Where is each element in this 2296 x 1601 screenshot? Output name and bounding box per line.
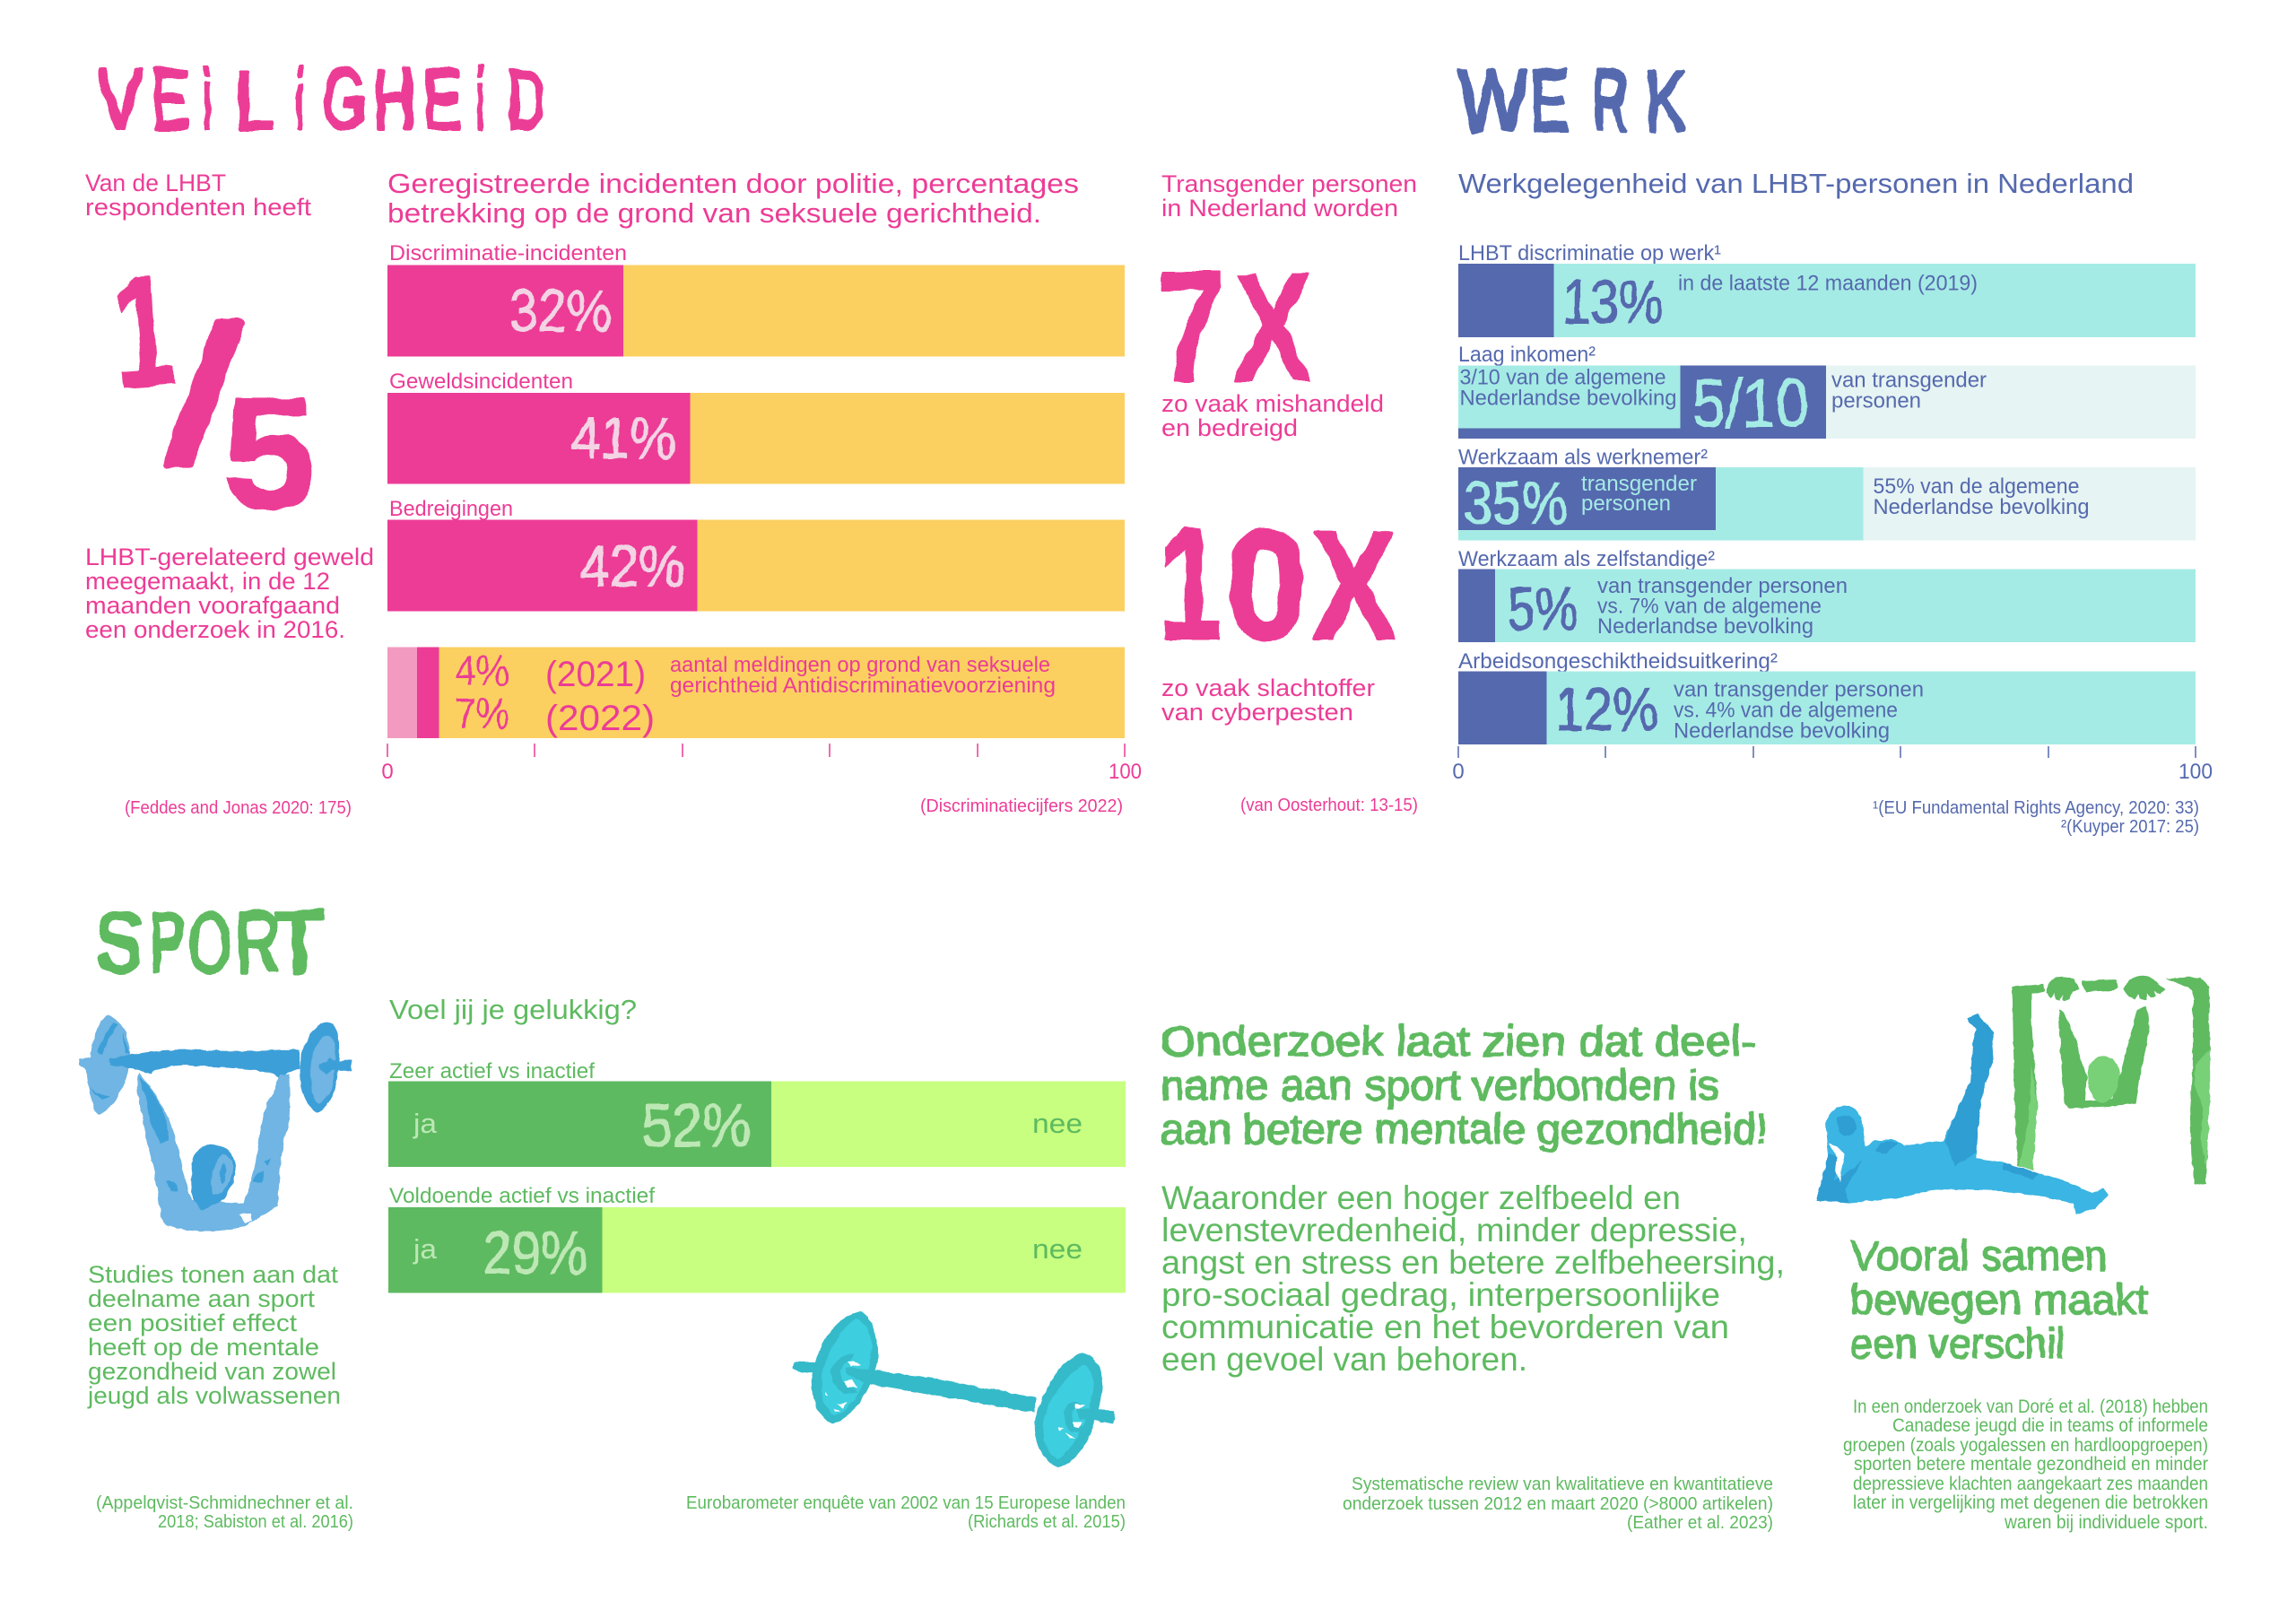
axis [1452, 746, 2213, 784]
axis: 100 [2179, 760, 2213, 784]
bar: voldoende actief 29%: ja [413, 1233, 438, 1265]
callout: samen bewegen: Vooral samen [1850, 1231, 2108, 1279]
sources [1873, 798, 2199, 837]
title: Sport [96, 894, 325, 990]
callout: onderzoek: Onderzoek laat zien dat deel- [1161, 1017, 1756, 1065]
title: Werk: K [1646, 53, 1685, 149]
title: Werk [1458, 53, 1685, 149]
text: benefits: een gevoel van behoren. [1161, 1341, 1527, 1378]
bar: meldingen 2021 and 2022: gerichtheid Antidiscriminatievoorziening [670, 674, 1056, 698]
intro text: respondents: Van de LHBT [85, 170, 226, 196]
text: benefits [1161, 1179, 1785, 1378]
callout: samen bewegen: bewegen maakt [1850, 1275, 2148, 1323]
illustration: weightlifter [79, 1015, 352, 1231]
chart heading: Geregistreerde incidenten door politie, percentages [387, 168, 1079, 199]
bar: zelfstandige 5% [1458, 547, 2196, 643]
callout: onderzoek [1161, 1017, 1768, 1153]
bar: bedreigingen 42%: 42% [580, 533, 685, 599]
big number: 7x: 7 [1157, 237, 1225, 415]
bar: werknemer 35%: Nederlandse bevolking [1873, 495, 2090, 519]
bar: discriminatie 32% [387, 241, 1125, 357]
source [96, 1493, 353, 1532]
text: studies: deelname aan sport [88, 1285, 316, 1312]
bar: discriminatie op werk 13% [1458, 241, 2196, 337]
title: Veiligheid: D [508, 52, 544, 146]
source: Systematische review van kwalitatieve en kwantitatieve [1352, 1475, 1773, 1494]
text: benefits: angst en stress en betere zelfbeheersing, [1161, 1244, 1785, 1281]
bar: laag inkomen 5/10: Laag inkomen² [1458, 343, 1596, 367]
bar chart: employment [1452, 241, 2213, 784]
text: studies: heeft op de mentale [88, 1334, 319, 1361]
text: mishandeld [1161, 390, 1384, 441]
big number: one in five [107, 239, 317, 542]
text: mishandeld: en bedreigd [1161, 414, 1298, 441]
title: Werk: W [1458, 53, 1526, 149]
axis: 100 [1109, 760, 1142, 784]
title: Veiligheid: E [152, 52, 188, 146]
callout: samen bewegen [1850, 1231, 2148, 1367]
title: Veiligheid [98, 52, 544, 146]
bar: discriminatie 32%: Discriminatie-incidenten [389, 241, 627, 265]
bar: voldoende actief 29%: nee [1032, 1233, 1083, 1265]
source: 2018; Sabiston et al. 2016) [158, 1512, 353, 1532]
title: Veiligheid: i [295, 52, 304, 146]
title: Sport: R [235, 894, 280, 990]
panel: werk [1452, 53, 2213, 837]
bar: werknemer 35% [1458, 445, 2196, 540]
source: (Feddes and Jonas 2020: 175) [125, 798, 352, 818]
big number: 7x [1157, 237, 1311, 415]
bar: discriminatie op werk 13%: 13% [1562, 268, 1664, 336]
bar: voldoende actief 29%: 29% [483, 1219, 587, 1287]
title: Veiligheid: V [98, 52, 143, 146]
intro text: respondents: respondenten heeft [85, 194, 312, 221]
source [1343, 1475, 1773, 1533]
big number: 10x [1159, 494, 1396, 673]
bar: laag inkomen 5/10: Nederlandse bevolking [1460, 386, 1677, 411]
text: violence experience: maanden voorafgaand [85, 592, 340, 619]
bar: arbeidsongeschiktheid 12%: Arbeidsongeschiktheidsuitkering² [1458, 649, 1778, 674]
big number: one in five: / [167, 287, 241, 504]
bar: voldoende actief 29%: Voldoende actief vs inactief [389, 1184, 655, 1208]
text: dore study: Canadese jeugd die in teams of informele [1892, 1415, 2208, 1436]
bar: zeer actief 52%: Zeer actief vs inactief [389, 1059, 595, 1083]
text: benefits: Waaronder een hoger zelfbeeld en [1161, 1179, 1681, 1216]
illustration: exercising figures [1816, 977, 2210, 1214]
bar: laag inkomen 5/10: van transgender [1831, 368, 1987, 393]
text: studies: gezondheid van zowel [88, 1358, 336, 1385]
chart heading: Werkgelegenheid van LHBT-personen in Nederland [1458, 168, 2134, 199]
bar: discriminatie op werk 13%: LHBT discriminatie op werk¹ [1458, 241, 1721, 265]
bar: zeer actief 52%: ja [413, 1108, 438, 1139]
bar: zelfstandige 5%: vs. 7% van de algemene [1597, 594, 1822, 619]
bar: zeer actief 52% [388, 1059, 1126, 1167]
text: studies: een positief effect [88, 1310, 298, 1336]
text: violence experience: een onderzoek in 2016. [85, 616, 345, 643]
source: (Appelqvist-Schmidnechner et al. [96, 1493, 353, 1513]
bar: meldingen 2021 and 2022: 7% [455, 691, 509, 738]
bar: zelfstandige 5%: Werkzaam als zelfstandige² [1458, 547, 1715, 571]
title: Werk: R [1593, 53, 1629, 149]
text: studies [87, 1261, 341, 1409]
intro text: respondents [85, 170, 312, 221]
text: cyberpesten: van cyberpesten [1161, 699, 1353, 726]
bar: arbeidsongeschiktheid 12%: 12% [1555, 675, 1658, 744]
text: studies: Studies tonen aan dat [88, 1261, 339, 1288]
bar: werknemer 35%: 55% van de algemene [1873, 474, 2079, 499]
bar: arbeidsongeschiktheid 12%: van transgender personen [1674, 678, 1924, 701]
text: transgender intro: Transgender personen [1161, 170, 1417, 197]
chart heading: Voel jij je gelukkig? [389, 994, 637, 1025]
callout: onderzoek: aan betere mentale gezondheid! [1161, 1105, 1768, 1153]
text: dore study: sporten betere mentale gezondheid en minder [1854, 1454, 2208, 1475]
axis: 0 [1452, 760, 1465, 784]
bar: werknemer 35%: transgender [1581, 472, 1697, 496]
bar: voldoende actief 29% [388, 1184, 1126, 1293]
text: mishandeld: zo vaak mishandeld [1161, 390, 1384, 417]
big number: one in five: 5 [223, 366, 317, 542]
title: Werk: E [1530, 53, 1569, 149]
title: Sport: T [274, 894, 325, 990]
text: benefits: levenstevredenheid, minder depressie, [1161, 1212, 1747, 1249]
panel: veiligheid [85, 52, 1418, 818]
source: (Eather et al. 2023) [1627, 1513, 1773, 1533]
bar: werknemer 35%: 35% [1464, 469, 1568, 537]
bar: arbeidsongeschiktheid 12%: vs. 4% van de algemene [1674, 698, 1898, 723]
callout: samen bewegen: een verschil [1850, 1319, 2065, 1367]
text: benefits: communicatie en het bevorderen van [1161, 1309, 1729, 1345]
bar: laag inkomen 5/10: 5/10 [1692, 366, 1809, 442]
title: Veiligheid: L [235, 52, 274, 146]
axis: 0 [381, 760, 394, 784]
big number: 7x: X [1234, 241, 1311, 413]
text: studies: jeugd als volwassenen [87, 1382, 341, 1409]
illustration: barbell [793, 1311, 1116, 1467]
text: violence experience: meegemaakt, in de 12 [85, 568, 330, 595]
panel: sport [79, 894, 2210, 1533]
big number: 10x: 0 [1226, 500, 1307, 672]
bar: meldingen 2021 and 2022: (2022) [545, 699, 655, 738]
source: (van Oosterhout: 13-15) [1240, 796, 1418, 815]
title: Sport: S [96, 894, 143, 990]
bar: bedreigingen 42%: Bedreigingen [389, 497, 513, 521]
text: dore study: depressieve klachten aangekaart zes maanden [1853, 1474, 2208, 1494]
text: dore study: later in vergelijking met degenen die betrokken [1853, 1492, 2208, 1513]
bar: meldingen 2021 and 2022: (2021) [545, 655, 646, 694]
bar: arbeidsongeschiktheid 12%: Nederlandse bevolking [1674, 719, 1890, 743]
source: (Discriminatiecijfers 2022) [920, 796, 1123, 816]
bar: zelfstandige 5%: Nederlandse bevolking [1597, 614, 1813, 639]
bar: discriminatie op werk 13%: in de laatste 12 maanden (2019) [1678, 271, 1978, 296]
title: Veiligheid: E [422, 52, 462, 146]
bar: werknemer 35%: Werkzaam als werknemer² [1458, 445, 1708, 470]
bar chart: incidents [381, 241, 1142, 784]
text: dore study: waren bij individuele sport. [2004, 1512, 2208, 1533]
bar: werknemer 35%: personen [1581, 492, 1671, 516]
title: Veiligheid: G [322, 52, 366, 146]
big number: 10x: 1 [1159, 494, 1222, 673]
source [686, 1493, 1126, 1532]
title: Veiligheid: i [475, 52, 484, 146]
chart heading: betrekking op de grond van seksuele gerichtheid. [387, 197, 1041, 229]
text: cyberpesten [1161, 674, 1375, 726]
title: Veiligheid: i [203, 52, 212, 146]
text: transgender intro [1161, 170, 1417, 222]
title: Sport: P [150, 894, 186, 990]
bar: meldingen 2021 and 2022: aantal meldingen op grond van seksuele [670, 653, 1050, 677]
chart heading [387, 168, 1079, 229]
bar: laag inkomen 5/10 [1458, 343, 2196, 442]
title: Veiligheid: H [373, 52, 415, 146]
bar: geweld 41% [387, 370, 1125, 484]
bar: zelfstandige 5%: van transgender personen [1597, 574, 1848, 598]
sources: ²(Kuyper 2017: 25) [2061, 817, 2199, 837]
bar: geweld 41%: 41% [571, 405, 676, 471]
bar: discriminatie 32%: 32% [509, 277, 612, 344]
bar: laag inkomen 5/10: 3/10 van de algemene [1460, 366, 1666, 389]
text: benefits: pro-sociaal gedrag, interpersoonlijke [1161, 1276, 1720, 1313]
text: dore study: In een onderzoek van Doré et al. (2018) hebben [1853, 1397, 2208, 1417]
bar: meldingen 2021 and 2022 [387, 648, 1125, 738]
source: onderzoek tussen 2012 en maart 2020 (>8000 artikelen) [1343, 1494, 1773, 1514]
text: dore study: groepen (zoals yogalessen en hardloopgroepen) [1843, 1435, 2208, 1456]
sources: ¹(EU Fundamental Rights Agency, 2020: 33) [1873, 798, 2199, 818]
big number: one in five: 1 [107, 239, 180, 422]
axis [381, 744, 1142, 784]
bar: zeer actief 52%: 52% [642, 1092, 751, 1160]
text: transgender intro: in Nederland worden [1161, 195, 1398, 222]
bar: zeer actief 52%: nee [1032, 1108, 1083, 1139]
source: Eurobarometer enquête van 2002 van 15 Europese landen [686, 1493, 1126, 1513]
bar: laag inkomen 5/10: personen [1831, 389, 1921, 413]
text: violence experience: LHBT-gerelateerd geweld [85, 544, 374, 570]
bar: arbeidsongeschiktheid 12% [1458, 649, 2196, 744]
text: cyberpesten: zo vaak slachtoffer [1161, 674, 1375, 701]
bar: geweld 41%: Geweldsincidenten [389, 370, 573, 394]
bar: meldingen 2021 and 2022: 4% [455, 648, 509, 695]
callout: onderzoek: name aan sport verbonden is [1161, 1061, 1719, 1109]
source: (Richards et al. 2015) [968, 1512, 1126, 1532]
bar: zelfstandige 5%: 5% [1508, 575, 1578, 643]
bar: bedreigingen 42% [387, 497, 1125, 612]
text: violence experience [85, 544, 374, 643]
text: dore study [1843, 1397, 2208, 1533]
title: Sport: O [188, 894, 231, 990]
big number: 10x: X [1312, 500, 1396, 672]
bar chart: happiness [388, 1059, 1126, 1293]
